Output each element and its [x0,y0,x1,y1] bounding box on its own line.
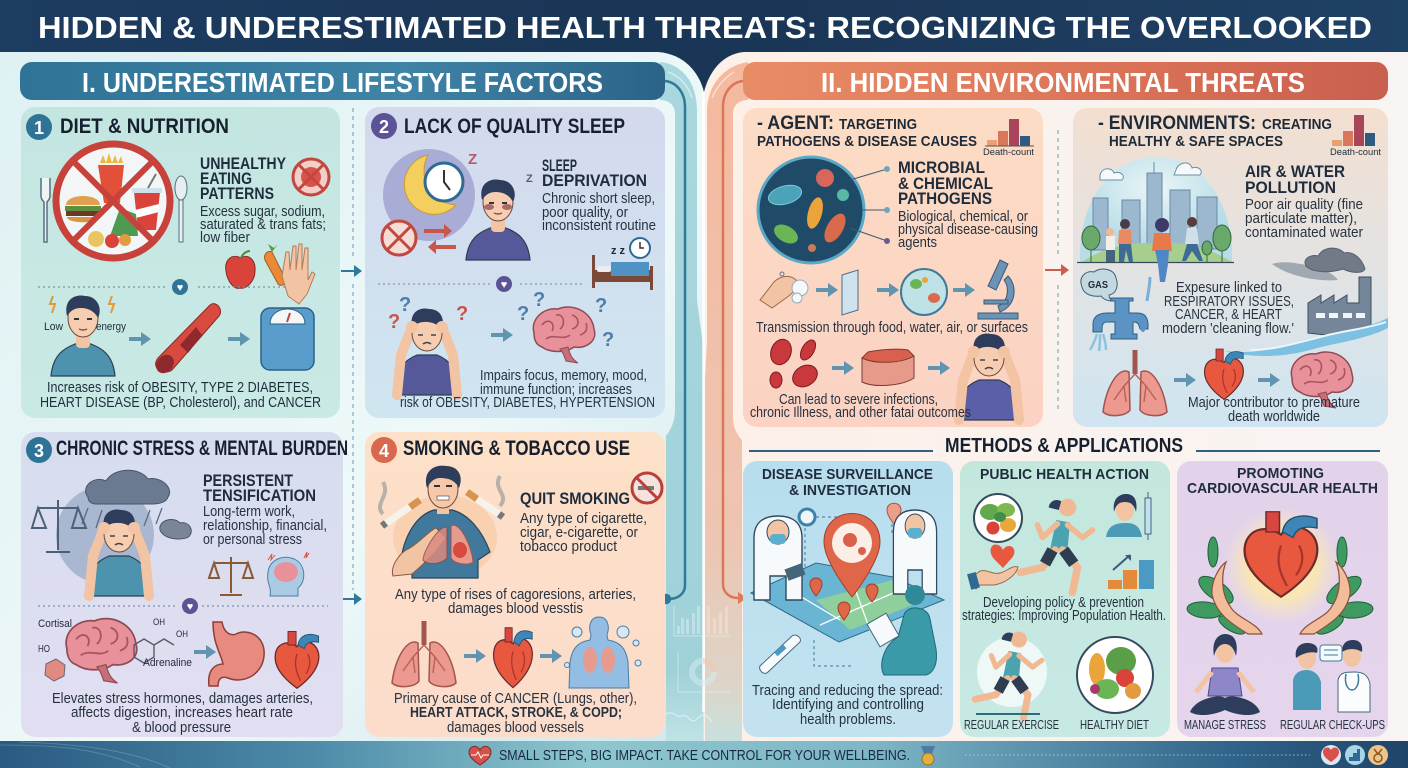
number badge 3 [26,437,52,463]
heading: - AGENT: [757,113,834,134]
outcome text: Can lead to severe infections, [779,392,938,408]
icon: person with headache [955,334,1023,420]
icon: gas cloud: GAS [1088,280,1108,291]
description [542,191,656,234]
risk text [40,379,321,411]
exposure text: CANCER, & HEART [1175,307,1282,323]
heading: LACK OF QUALITY SLEEP [404,115,625,138]
flow line right [723,81,747,604]
icon: footer chart badge [1345,745,1365,765]
icon: gas cloud [1081,269,1117,301]
icon: stressed person with question marks [388,294,468,395]
effects text: Impairs focus, memory, mood, [480,368,647,384]
description [898,209,1038,251]
description [200,204,326,246]
icon: low energy person: Low [44,321,63,333]
icon: smoke and factory [1272,248,1371,336]
icon: brain with question marks [517,289,614,363]
description [520,511,647,555]
subheading: PERSISTENT [203,471,294,490]
icon: crossed-out plate of junk food [41,144,187,258]
description: or personal stress [203,532,302,548]
subheading: PATTERNS [200,184,274,203]
dotted divider with heart [38,598,328,614]
icon: microscope [978,260,1018,319]
icon: brain with question marks: ? [533,289,545,311]
effects text: Elevates stress hormones, damages arteries, [52,691,313,707]
icon: footer heart badge [1321,745,1341,765]
icon: footer medal badge [1368,745,1388,765]
description: Excess sugar, sodium, [200,204,325,220]
title bar: HIDDEN & UNDERESTIMATED HEALTH THREATS: RECOGNIZING THE OVERLOOKED [38,10,1372,45]
arrow [194,645,216,659]
exposure text: Expesure linked to [1176,280,1282,296]
icon: no sign with arrows [382,221,456,255]
arrow [1258,373,1280,387]
description: Tracing and reducing the spread: [752,683,943,699]
icon: brain with hormones: Adrenaline [143,657,192,669]
arrow [877,283,899,297]
dotted divider with heart: ♥ [187,601,193,613]
icon: stressed person with question marks: ? [399,294,411,316]
decorative strip charts [666,606,730,722]
heading: CARDIOVASCULAR HEALTH [1187,480,1378,497]
icon: medal [921,746,935,765]
right section header: II. HIDDEN ENVIRONMENTAL THREATS [821,67,1305,98]
subheading: PATHOGENS [898,189,992,208]
description: inconsistent routine [542,218,656,234]
description: Biological, chemical, or [898,209,1028,225]
icon: bed with clock: z z [611,245,626,257]
subheading [1245,162,1345,197]
arrow: panel 3 to 4 [341,593,362,605]
panel: diet and nutrition [21,107,340,418]
dotted divider with heart: ♥ [501,279,507,291]
icon: brain [1291,352,1353,408]
strip centre highlight [702,92,705,712]
description: agents [898,235,937,251]
subheading: AIR & WATER [1245,162,1345,181]
icon: salad [974,494,1022,542]
risk text: HEART DISEASE (BP, Cholesterol), and CANCER [40,394,321,411]
description: Identifying and controlling [772,697,924,713]
description [752,683,943,728]
description: saturated & trans fats; [200,217,326,233]
icon: bed with clock [592,238,653,290]
icon: filter [842,270,858,315]
right section background [704,52,1408,741]
number badge 1: 1 [34,118,44,138]
panel: disease surveillance [743,461,953,737]
icon: no tomato [293,159,329,195]
subheading [542,156,647,190]
icon: moon and clock [383,149,533,241]
description [962,595,1166,624]
heading [762,466,933,499]
arrow [129,332,151,346]
subheading: SLEEP [542,156,577,175]
heading: PROMOTING [1237,465,1324,482]
description: Any type of cigarette, [520,511,647,527]
icon: healthy diet bowl [1077,637,1153,713]
dotted divider with heart: ♥ [177,282,183,294]
arrow [832,361,854,375]
number badge 2 [371,113,397,139]
icon: tissue [862,349,914,385]
icon: weight scale [261,308,314,370]
heading: methods and applications: METHODS & APPLICATIONS [945,435,1183,457]
heading [1098,113,1332,150]
heading: DISEASE SURVEILLANCE [762,466,933,483]
icon: petri dish with microbes [758,157,890,263]
icon: heart pulse [469,746,491,765]
description: health problems. [800,712,896,728]
heading: CHRONIC STRESS & MENTAL BURDEN [56,437,348,460]
icon: patient and doctor [1293,640,1370,712]
labels: MANAGE STRESS [1184,718,1266,732]
icon: meditating woman [1190,634,1260,715]
icon: no smoking [632,473,662,503]
effects text: affects digestion, increases heart rate [71,705,293,721]
subheading: QUIT SMOKING [520,489,630,508]
icon: body with lungs [564,617,641,688]
arrow [928,361,950,375]
number badge 4: 4 [379,441,389,461]
icon: city with people and trees [1077,157,1234,301]
icon: polluted water wave [1220,318,1388,356]
icon: stressed person under rain cloud [56,470,191,596]
description: Chronic short sleep, [542,191,655,207]
icon: brain with hormones: OH [153,617,165,627]
arrow: agent to environments [1045,264,1069,276]
right orange strip [705,62,748,741]
risk text: Increases risk of OBESITY, TYPE 2 DIABETES, [47,379,313,396]
icon: health worker with syringe [1106,492,1151,540]
description: low fiber [200,230,250,246]
heading: PATHOGENS & DISEASE CAUSES [757,133,977,150]
heading: HEALTHY & SAFE SPACES [1109,133,1283,150]
middle text: Any type of rises of cagoresions, arteries, [395,587,636,603]
description: Developing policy & prevention [983,595,1144,611]
labels: HEALTHY DIET [1080,718,1149,732]
icon: heart held in hands with leaves [1186,507,1374,638]
icon: water tap [1090,298,1148,351]
icon: low energy person [44,296,126,376]
middle text [395,587,636,617]
footer bar [0,741,1408,768]
icon: heart [494,628,532,688]
labels [964,718,1149,732]
description: cigar, e-cigarette, or [520,525,638,541]
transmission text: Transmission through food, water, air, or surfaces [756,320,1028,336]
dotted divider with heart [378,276,582,292]
dashed separators [353,108,1058,590]
outcome text: chronic Illness, and other fatai outcomes [750,405,971,421]
icon: brain with hormones: Cortisal [38,618,72,630]
subheading [200,154,287,203]
icon: stressed person with question marks: ? [456,303,468,325]
arrow [491,328,513,342]
arrow: panel 1 to 2 [341,265,362,277]
icon: brain with hormones: OH [176,629,188,639]
outcome text [1188,395,1360,425]
effects text: Primary cause of CANCER (Lungs, other), [394,691,637,707]
panel: agent [743,108,1043,427]
arrow [953,283,975,297]
heading: PUBLIC HEALTH ACTION [980,466,1149,483]
icon: apple, carrot and stop hand [226,244,315,304]
footer message: SMALL STEPS, BIG IMPACT. TAKE CONTROL FOR YOUR WELLBEING. [499,748,910,764]
effects text: risk of OBESITY, DIABETES, HYPERTENSION [400,395,655,411]
outcome text [750,392,971,421]
description: Poor air quality (fine [1245,197,1363,213]
icon: petri dish [901,269,947,315]
heading: DIET & NUTRITION [60,115,229,138]
labels: REGULAR EXERCISE [964,718,1059,732]
heading: & INVESTIGATION [789,482,911,499]
effects text [400,368,655,411]
exposure text: modern 'cleaning flow.' [1162,321,1294,337]
icon: heart [275,632,319,688]
description: tobacco product [520,539,617,555]
effects text: damages blood vessels [447,720,584,736]
labels [1184,718,1385,732]
arrow [1174,373,1196,387]
effects text: & blood pressure [132,720,231,736]
chart: death count: Death-count [1330,147,1382,157]
exposure text: RESPIRATORY ISSUES, [1164,294,1294,310]
description: contaminated water [1245,225,1363,241]
panel: cardiovascular health [1177,461,1388,737]
flow line left [662,81,685,603]
outcome text: death worldwide [1228,409,1320,425]
description: relationship, financial, [203,518,327,534]
subheading: POLLUTION [1245,178,1336,197]
right section header [743,62,1388,100]
outcome text: Major contributor to premature [1188,395,1360,411]
subheading: UNHEALTHY [200,154,287,173]
subheading: MICROBIAL [898,158,985,177]
arrow [540,649,562,663]
icon: moon and clock: Z [468,151,477,168]
left section header: I. UNDERESTIMATED LIFESTYLE FACTORS [82,67,603,98]
panel: smoking [365,432,665,737]
icon: brain with question marks: ? [517,303,529,325]
icon: lungs [392,621,456,687]
icon: rising bars [1108,555,1154,589]
heading: - ENVIRONMENTS: [1098,113,1256,134]
description: Long-term work, [203,504,295,520]
heading: CREATING [1262,116,1332,133]
heading [1187,465,1378,497]
number badge 4 [371,437,397,463]
icon: hand washing [760,272,808,308]
panel: public health action [960,461,1170,737]
icon: brain with hormones [38,617,192,683]
icon: heart in hand [967,544,1018,590]
icon: smoker with cigarettes and lungs [380,466,503,579]
effects text: HEART ATTACK, STROKE, & COPD; [410,705,622,721]
arrow [816,283,838,297]
description: physical disease-causing [898,222,1038,238]
number badge 3: 3 [34,441,44,461]
icon: brain with question marks: ? [595,295,607,317]
subheading [203,471,316,505]
left teal strip [660,62,703,741]
description [1245,197,1363,241]
dotted divider with heart [38,279,285,295]
title bar [0,0,1408,100]
icon: red blood cells [767,336,821,391]
icon: moon and clock: Z [526,173,533,185]
panel: environments [1073,108,1388,427]
subheading: EATING [200,169,252,188]
icon: stressed person with question marks: ? [388,311,400,333]
icon: regular exercise runner [975,631,1047,718]
icon: runner [1020,499,1092,592]
icon: lungs [1103,350,1167,416]
effects text [394,691,637,736]
exposure text [1162,280,1294,337]
number badge 1 [26,114,52,140]
icon: low energy person: energy [96,321,126,333]
icon: damaged artery [152,304,221,377]
strip curved highlights [668,72,734,98]
arrow [228,332,250,346]
description: particulate matter), [1245,211,1357,227]
description: strategies: Improving Population Health. [962,608,1166,624]
chart: death count [1330,115,1382,157]
description [203,504,327,548]
subheading: & CHEMICAL [898,174,993,193]
number badge 2: 2 [379,117,389,137]
arrow [464,649,486,663]
panel: lack of quality sleep [365,107,665,418]
icon: brain with question marks: ? [602,329,614,351]
icon: stomach [209,622,264,686]
icon: balance scale [32,500,86,552]
heading: SMOKING & TOBACCO USE [403,437,630,460]
subheading: DEPRIVATION [542,171,647,190]
chart: death count: Death-count [983,147,1035,157]
icon: small scale and head with brain [209,552,309,596]
icon: brain with hormones: HO [38,644,50,655]
icon: tired person [466,180,530,260]
icon: map with pins and investigators [751,503,944,675]
panel: chronic stress [21,432,348,737]
icon: heart [1205,349,1243,399]
heading [757,113,977,150]
description: poor quality, or [542,205,628,221]
middle text: damages blood vesstis [448,601,583,617]
effects text [52,691,313,736]
chart: death count [983,119,1035,157]
subheading [898,158,993,208]
effects text: immune function; increases [480,382,632,398]
heading: TARGETING [839,116,917,133]
subheading: TENSIFICATION [203,486,316,505]
left section background [0,52,704,741]
